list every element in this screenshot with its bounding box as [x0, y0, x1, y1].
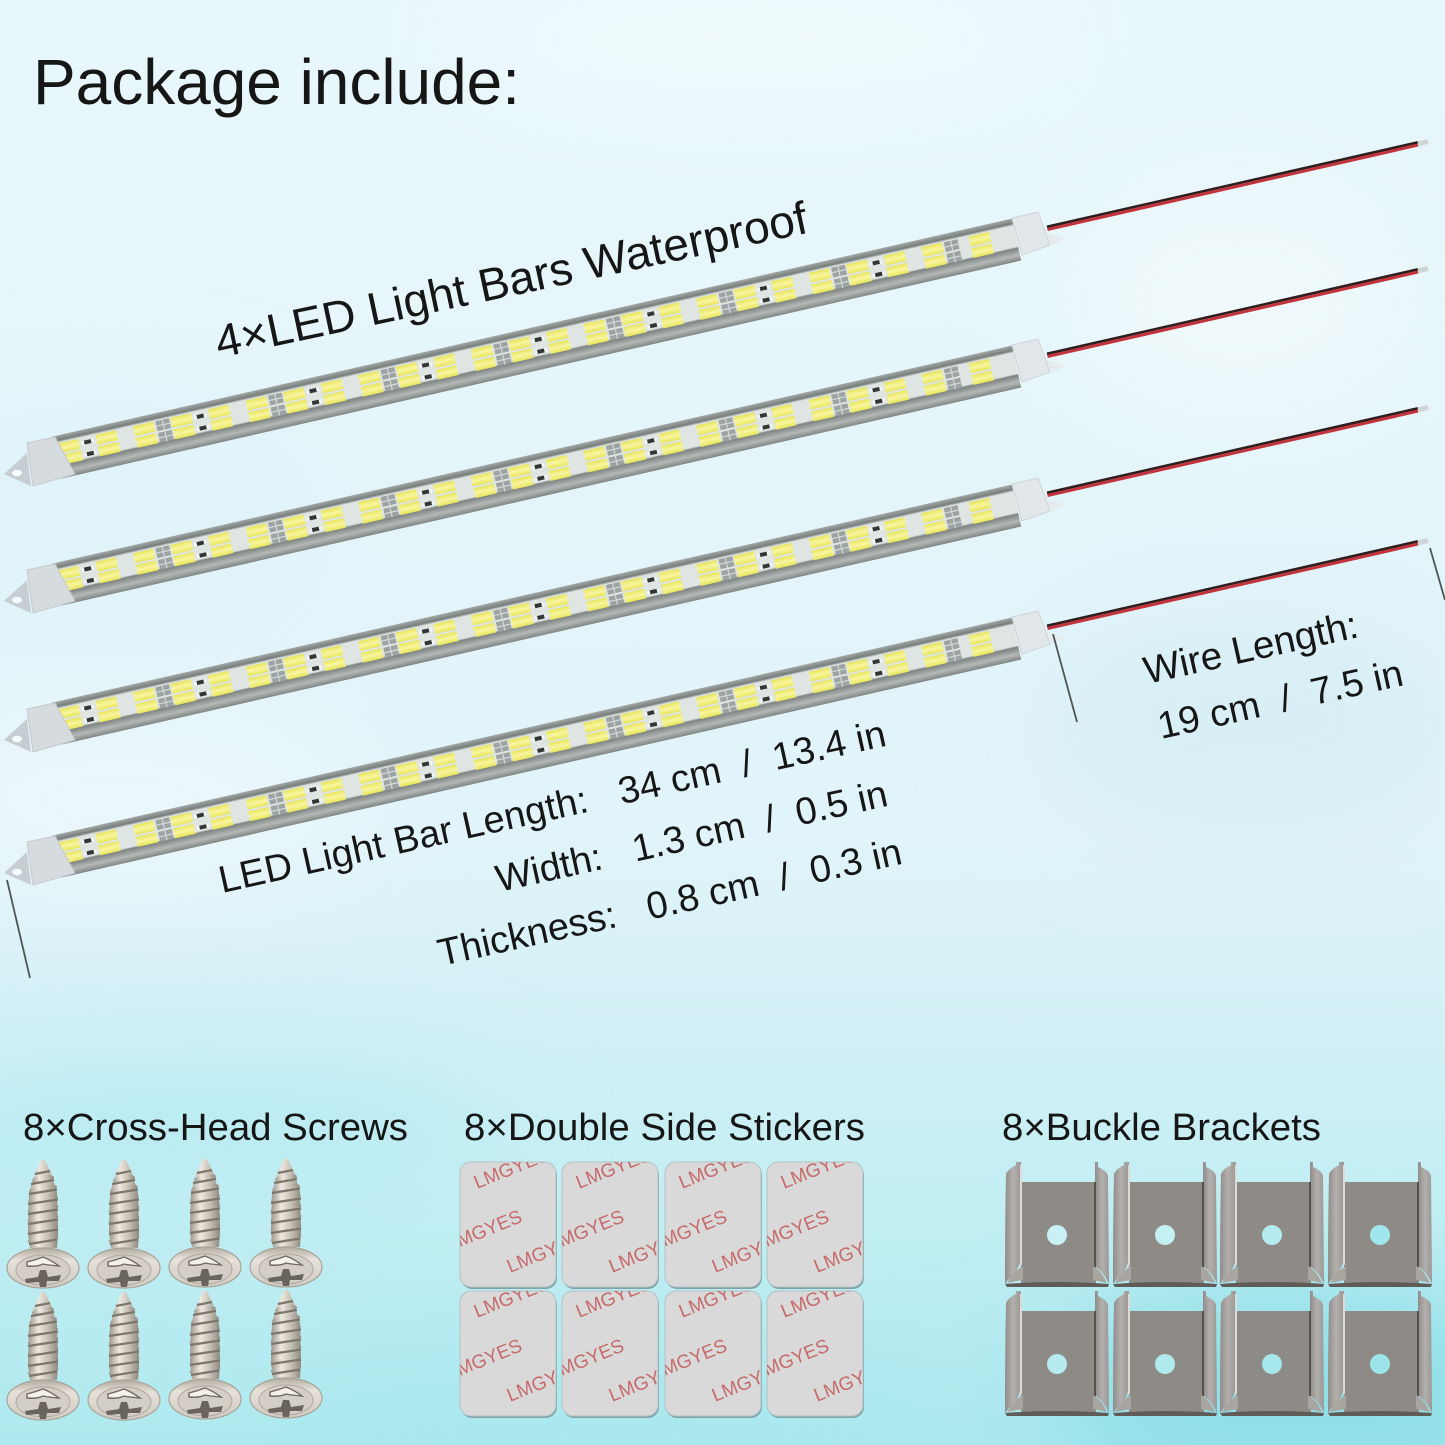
sticker 1: LMGYES	[471, 1144, 552, 1194]
screws group	[7, 1159, 322, 1420]
dimension line: bar length	[7, 880, 30, 978]
length: LED Light Bar Length: 34 cm / 13.4 in	[215, 713, 890, 902]
sticker 3: LMGYES	[676, 1144, 757, 1194]
screw 6	[88, 1292, 160, 1420]
sticker 1	[460, 1162, 557, 1289]
LED light bar 1	[4, 142, 1428, 486]
bracket 6	[1113, 1291, 1217, 1416]
sticker 4: LMGYES	[751, 1206, 832, 1256]
brackets label: 8×Buckle Brackets	[1002, 1106, 1321, 1149]
bracket 1	[1005, 1162, 1109, 1287]
wire value: 19 cm / 7.5 in	[1154, 653, 1407, 748]
sticker 7: LMGYES	[709, 1357, 790, 1407]
sticker 4: LMGYES	[811, 1228, 892, 1278]
brackets group	[1005, 1162, 1432, 1416]
LED light bar 3	[4, 408, 1428, 752]
sticker 1: LMGYES	[444, 1206, 525, 1256]
screw 8	[250, 1290, 322, 1418]
sticker 2	[562, 1162, 659, 1289]
wire label: Wire Length:	[1140, 604, 1362, 693]
screw 1	[7, 1160, 79, 1288]
screws label: 8×Cross-Head Screws	[23, 1106, 408, 1149]
thickness: Thickness: 0.8 cm / 0.3 in	[434, 831, 906, 975]
LED light bar 2	[4, 268, 1428, 613]
screw 5	[7, 1292, 79, 1420]
width: Width: 1.3 cm / 0.5 in	[492, 773, 891, 901]
bracket 8	[1328, 1291, 1432, 1416]
sticker 5: LMGYES	[444, 1335, 525, 1385]
sticker 6: LMGYES	[546, 1335, 627, 1385]
stickers label: 8×Double Side Stickers	[464, 1106, 865, 1149]
stickers group	[460, 1162, 864, 1418]
sticker 5: LMGYES	[504, 1357, 585, 1407]
sticker 7: LMGYES	[649, 1335, 730, 1385]
sticker 8: LMGYES	[811, 1357, 892, 1407]
screw 2	[88, 1160, 160, 1288]
sticker 8: LMGYES	[751, 1335, 832, 1385]
sticker 7: LMGYES	[676, 1273, 757, 1323]
sticker 2: LMGYES	[606, 1228, 687, 1278]
wire length text	[1140, 604, 1407, 748]
bracket 7	[1220, 1291, 1324, 1416]
bracket 2	[1113, 1162, 1217, 1287]
sticker 2: LMGYES	[573, 1144, 654, 1194]
sticker 3: LMGYES	[649, 1206, 730, 1256]
sticker 8: LMGYES	[778, 1273, 859, 1323]
sticker 6: LMGYES	[606, 1357, 687, 1407]
bracket 5	[1005, 1291, 1109, 1416]
sticker 3	[664, 1162, 762, 1289]
screw 7	[169, 1291, 241, 1419]
bracket 3	[1220, 1162, 1324, 1287]
sticker 4	[766, 1162, 864, 1289]
sticker 7	[664, 1290, 762, 1418]
LED light bar 4	[4, 540, 1428, 885]
dimension line: wire end	[1430, 548, 1445, 600]
screw 3	[169, 1159, 241, 1287]
title: Package include:	[33, 46, 520, 118]
dimension line: wire start	[1053, 634, 1077, 722]
sticker 6: LMGYES	[573, 1273, 654, 1323]
bar dimensions text	[215, 713, 906, 975]
sticker 3: LMGYES	[709, 1228, 790, 1278]
sticker 6	[562, 1290, 659, 1418]
screw 4	[250, 1159, 322, 1287]
sticker 8	[766, 1290, 864, 1418]
sticker 5	[460, 1290, 557, 1418]
sticker 5: LMGYES	[471, 1273, 552, 1323]
sticker 1: LMGYES	[504, 1228, 585, 1278]
sticker 4: LMGYES	[778, 1144, 859, 1194]
bracket 4	[1328, 1162, 1432, 1287]
sticker 2: LMGYES	[546, 1206, 627, 1256]
bars heading: 4×LED Light Bars Waterproof	[210, 191, 812, 368]
